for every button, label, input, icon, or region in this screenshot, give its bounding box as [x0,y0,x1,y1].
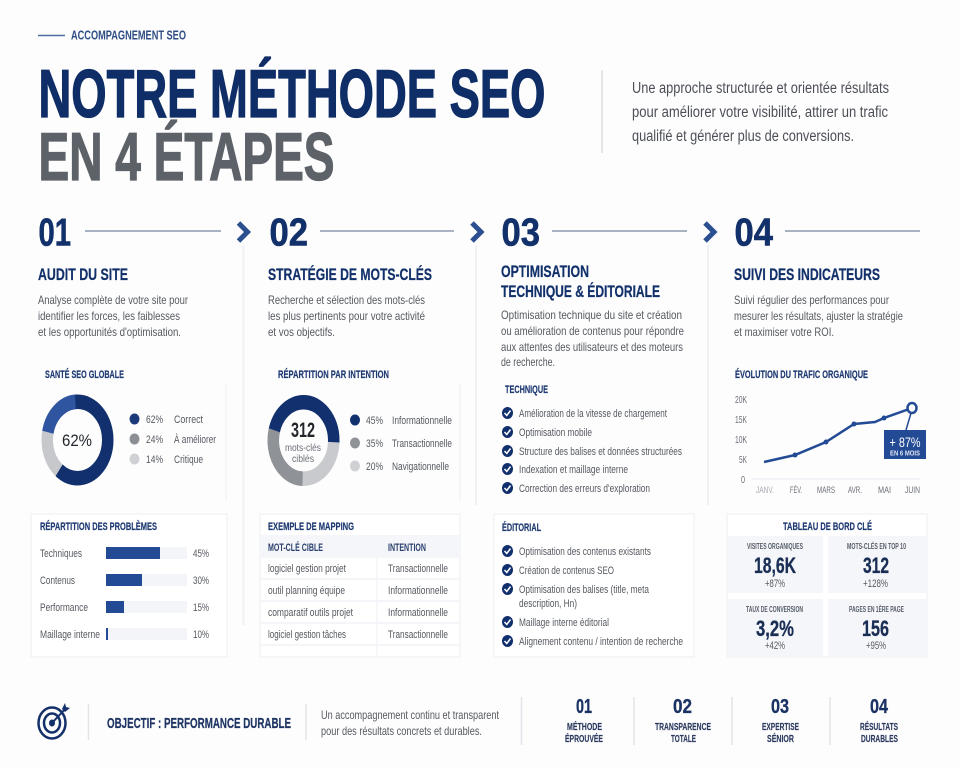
KPI: visites organiques: +87% [765,578,785,590]
legend: intention [350,414,452,473]
footer pillar 04 [860,696,898,745]
bar chart: problèmes: Techniques [40,548,82,560]
line chart: évolution du trafic organique: 15K [735,414,747,426]
bar chart: problèmes: Performance [40,602,88,614]
step 3 heading and description: Optimisation technique du site et création [501,308,682,322]
step 2 heading and description [268,265,432,339]
step 3 heading and description: OPTIMISATION [501,262,589,281]
step 2 header: number, rule and arrow [270,212,481,254]
footer pillar 01: MÉTHODE [567,720,602,733]
checklist: technique: Indexation et maillage interne [519,464,628,476]
step 2 heading and description: STRATÉGIE DE MOTS-CLÉS [268,265,432,284]
panel: exemple de mapping [260,514,460,657]
step 2 heading and description: Recherche et sélection des mots-clés [268,293,425,307]
footer objective: OBJECTIF : PERFORMANCE DURABLE [107,715,291,732]
step 1 heading and description: AUDIT DU SITE [38,265,128,284]
checklist: technique [502,384,682,495]
footer pillar 03: 03 [771,696,789,718]
legend: intention: Informationnelle [392,415,452,427]
KPI: mots-clés en top 10: MOTS-CLÉS EN TOP 10 [847,542,906,551]
legend: santé SEO: Critique [174,454,203,466]
legend: santé SEO: Correct [174,414,203,426]
KPI: mots-clés en top 10: +128% [863,578,888,590]
KPI: pages en 1ère page: +95% [866,640,886,652]
KPI: pages en 1ère page [828,599,926,657]
step 1 header: number, rule and arrow: 01 [38,212,71,254]
legend: santé SEO [130,414,216,466]
legend: santé SEO: 14% [146,454,163,466]
step 3 heading and description: TECHNIQUE & ÉDITORIALE [501,282,660,301]
panel: exemple de mapping: EXEMPLE DE MAPPING [268,521,354,533]
footer pillar 01: 01 [576,696,592,718]
panel: éditorial checklist: description, Hn) [519,598,577,610]
bar chart: problèmes [40,547,209,641]
KPI: taux de conversion: +42% [765,640,785,652]
line chart: évolution du trafic organique: 20K [735,394,747,406]
table: mapping: Transactionnelle [388,629,448,641]
step 3 header: number, rule and arrow: 03 [502,212,540,254]
footer pillar 04: DURABLES [861,734,898,745]
KPI: pages en 1ère page: PAGES EN 1ÈRE PAGE [849,605,904,614]
footer pillar 04: 04 [870,696,889,718]
donut centre label: mots-clés [285,442,321,454]
KPI: taux de conversion [727,599,823,657]
step 1 heading and description: et les opportunités d'optimisation. [38,325,181,339]
table: mapping [261,535,459,656]
step 1 header: number, rule and arrow [38,212,248,254]
KPI: taux de conversion: 3,2% [756,616,794,641]
KPI: taux de conversion: TAUX DE CONVERSION [746,605,803,614]
footer pillar 02: TOTALE [671,734,696,745]
step 3 heading and description [501,262,684,369]
panel: tableau de bord clé [727,514,927,657]
table: mapping: comparatif outils projet [268,607,353,619]
step 4 header: number and rule: 04 [734,212,773,254]
bar chart: problèmes: 15% [193,602,209,614]
callout: +87 %: + 87% [890,434,920,450]
KPI: mots-clés en top 10 [828,536,926,593]
eyebrow: accompagnement SEO: ACCOMPAGNEMENT SEO [71,28,186,42]
checklist: technique: Amélioration de la vitesse de chargement [519,408,667,420]
bar chart: problèmes: 30% [193,575,209,587]
line chart: évolution du trafic organique: 10K [735,434,747,446]
step 3 heading and description: ou amélioration de contenus pour répondre [501,324,684,338]
footer text block [321,708,499,738]
panel: éditorial checklist: ÉDITORIAL [502,521,541,534]
footer pillar 01 [565,696,603,745]
legend: intention: 35% [366,438,383,450]
footer pillar 02: TRANSPARENCE [655,722,711,733]
table: mapping: INTENTION [388,542,426,554]
legend: intention: Transactionnelle [392,438,452,450]
footer pillar 02: 02 [673,696,692,718]
bar chart: problèmes: Contenus [40,575,75,587]
step 1 heading and description: Analyse complète de votre site pour [38,293,188,307]
bar chart: problèmes: 45% [193,548,209,560]
line chart: évolution du trafic organique [735,368,926,496]
line chart: évolution du trafic organique: 0 [741,474,745,486]
KPI: visites organiques: VISITES ORGANIQUES [747,542,803,551]
panel: éditorial checklist: Alignement contenu / intention de recherche [519,636,683,648]
legend: santé SEO: 24% [146,434,163,446]
footer text block: Un accompagnement continu et transparent [321,708,499,722]
bar chart: problèmes: 10% [193,629,209,641]
step 3 header: number, rule and arrow [502,212,714,254]
bar chart: problèmes: Maillage interne [40,629,100,641]
step 4 heading and description: et maximiser votre ROI. [734,325,834,339]
line chart: évolution du trafic organique: ÉVOLUTION DU TRAFIC ORGANIQUE [735,368,868,381]
step 1 heading and description [38,265,188,339]
step 2 heading and description: les plus pertinents pour votre activité [268,309,425,323]
step 2 heading and description: et vos objectifs. [268,325,335,339]
panel: éditorial checklist: Optimisation des contenus existants [519,546,651,558]
KPI: visites organiques: 18,6K [754,553,796,578]
icon: target [38,703,70,738]
line chart: évolution du trafic organique: MAI [878,485,891,496]
intro text block: pour améliorer votre visibilité, attirer un trafic [632,104,888,121]
KPI: mots-clés en top 10: 312 [863,553,889,578]
title: NOTRE MÉTHODE SEO [38,56,546,132]
step 3 heading and description: de recherche. [501,355,555,369]
panel: tableau de bord clé: TABLEAU DE BORD CLÉ [783,520,872,533]
panel: répartition des problèmes: RÉPARTITION DES PROBLÈMES [40,520,157,533]
step 4 heading and description: SUIVI DES INDICATEURS [734,265,880,284]
table: mapping: logiciel gestion tâches [268,629,346,641]
line chart: évolution du trafic organique: AVR. [848,485,862,496]
KPI: pages en 1ère page: 156 [862,616,889,641]
footer pillar 03: EXPERTISE [762,722,799,733]
table: mapping: Informationnelle [388,585,448,597]
footer pillar 03: SÉNIOR [767,732,795,745]
table: mapping: logiciel gestion projet [268,563,346,575]
checklist: technique: Structure des balises et données structurées [519,446,682,458]
panel: répartition par intention: RÉPARTITION PAR INTENTION [278,368,389,381]
panel: répartition par intention [261,368,460,500]
intro text block: Une approche structurée et orientée résultats [632,80,889,97]
footer pillar 02 [655,696,711,745]
line chart: évolution du trafic organique: MARS [817,485,835,496]
step 4 heading and description: Suivi régulier des performances pour [734,293,889,307]
table: mapping: Transactionnelle [388,563,448,575]
step 1 heading and description: identifier les forces, les faiblesses [38,309,180,323]
donut centre label: ciblés [292,453,314,465]
donut value: 62% [62,431,92,450]
legend: santé SEO: À améliorer [174,433,216,446]
panel: éditorial checklist: Maillage interne éditorial [519,617,609,629]
donut chart: santé SEO [35,386,120,494]
legend: santé SEO: 62% [146,414,163,426]
checklist: technique: Correction des erreurs d'exploration [519,483,650,495]
panel: éditorial checklist: Création de contenus SEO [519,565,614,577]
title: EN 4 ÉTAPES [38,119,334,195]
panel: santé SEO globale: SANTÉ SEO GLOBALE [45,368,124,381]
footer text block: pour des résultats concrets et durables. [321,724,482,738]
line chart: évolution du trafic organique: JUIN [905,485,920,496]
line chart: évolution du trafic organique: FÉV. [790,485,802,496]
donut centre label [285,419,321,465]
panel: éditorial checklist: Optimisation des balises (title, meta [519,584,650,596]
donut centre label: 312 [291,419,315,442]
step 4 heading and description [734,265,903,339]
checklist: technique: TECHNIQUE [505,384,548,396]
title [38,56,546,195]
KPI: visites organiques [727,536,823,593]
legend: intention: Navigationnelle [392,461,449,473]
table: mapping: Informationnelle [388,607,448,619]
step 2 header: number, rule and arrow: 02 [270,212,308,254]
step 3 heading and description: aux attentes des utilisateurs et des moteurs [501,340,683,354]
intro text block [602,70,889,153]
footer pillar 01: ÉPROUVÉE [565,732,603,745]
panel: santé SEO globale [35,368,226,500]
step 4 heading and description: mesurer les résultats, ajuster la stratégie [734,309,903,323]
panel: éditorial checklist [494,514,694,657]
legend: intention: 45% [366,415,383,427]
legend: intention: 20% [366,461,383,473]
intro text block: qualifié et générer plus de conversions. [632,128,854,145]
panel: répartition des problèmes [31,514,227,657]
table: mapping: outil planning équipe [268,585,345,597]
footer pillar 04: RÉSULTATS [860,720,898,733]
footer pillar 03 [762,696,799,745]
line chart: évolution du trafic organique: 5K [739,454,747,466]
callout: +87 % [884,430,926,459]
callout: +87 %: EN 6 MOIS [890,448,920,458]
donut chart: intention [261,387,346,494]
checklist: technique: Optimisation mobile [519,427,592,439]
line chart: évolution du trafic organique: JANV. [756,485,774,496]
table: mapping: MOT-CLÉ CIBLE [268,541,323,554]
